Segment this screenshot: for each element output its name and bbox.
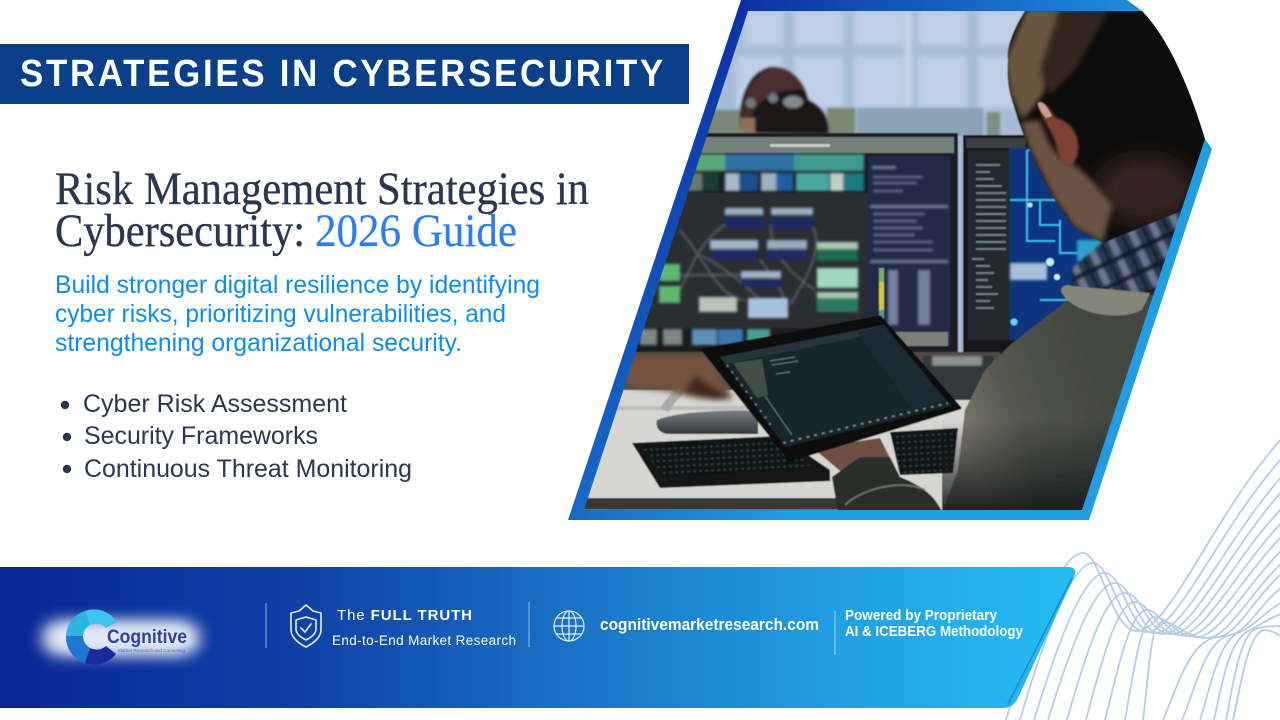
heading: 2026 Guide: [315, 205, 517, 257]
logo: Cognitive: [107, 627, 187, 648]
left hand on desk: [624, 356, 733, 400]
subtitle: cyber risks, prioritizing vulnerabilities, and: [55, 300, 506, 328]
icon: globe: [554, 611, 584, 641]
photo frame: [568, 0, 1212, 520]
tagline: full truth: The FULL TRUTH: [337, 607, 472, 624]
decorative wave lines: [1006, 435, 1280, 720]
background colleague: [740, 67, 828, 134]
monitor bottom row: [640, 329, 657, 345]
main monitor: [636, 132, 959, 353]
analyst body: [942, 0, 1220, 520]
bullet list: [61, 390, 412, 483]
tagline: full truth: [332, 607, 516, 648]
methodology text: Powered by Proprietary: [845, 608, 997, 624]
methodology text: [845, 608, 1023, 640]
bullet list: Continuous Threat Monitoring: [84, 455, 412, 483]
title banner: [0, 44, 689, 104]
keyboards: [632, 428, 958, 488]
icon: shield: [291, 605, 321, 647]
bullet list: Cyber Risk Assessment: [83, 390, 347, 418]
monitor side panel: [868, 156, 950, 346]
methodology text: AI & ICEBERG Methodology: [845, 624, 1023, 640]
ear: [1038, 102, 1078, 166]
hoodie: [944, 294, 1154, 510]
plaid shirt: [1073, 208, 1185, 300]
tablet: [703, 317, 960, 460]
footer banner: [0, 567, 1075, 708]
head and neck: [1007, 11, 1205, 244]
photo: analyst at monitors: [560, 0, 1220, 520]
logo: [42, 609, 200, 665]
subtitle: [55, 271, 540, 357]
heading: [55, 163, 589, 257]
background partition: [700, 108, 1000, 136]
website: cognitivemarketresearch.com: [600, 615, 819, 634]
subtitle: Build stronger digital resilience by identifying: [55, 271, 540, 299]
diagram nodes: [725, 208, 763, 215]
right monitor: [963, 135, 1110, 356]
desk: [560, 352, 1000, 515]
logo: Market Research and Consulting: [118, 648, 185, 653]
title text: STRATEGIES IN CYBERSECURITY: [20, 53, 666, 95]
tablet arm: [813, 438, 942, 512]
bullet list: Security Frameworks: [84, 422, 318, 450]
diagram wires: [680, 225, 816, 315]
tagline: full truth: End-to-End Market Research: [332, 633, 516, 648]
heading: Cybersecurity:: [55, 205, 305, 257]
dividers: [266, 602, 835, 655]
subtitle: strengthening organizational security.: [55, 329, 462, 357]
heading: Risk Management Strategies in: [55, 163, 589, 215]
window panes: [736, 11, 1024, 108]
